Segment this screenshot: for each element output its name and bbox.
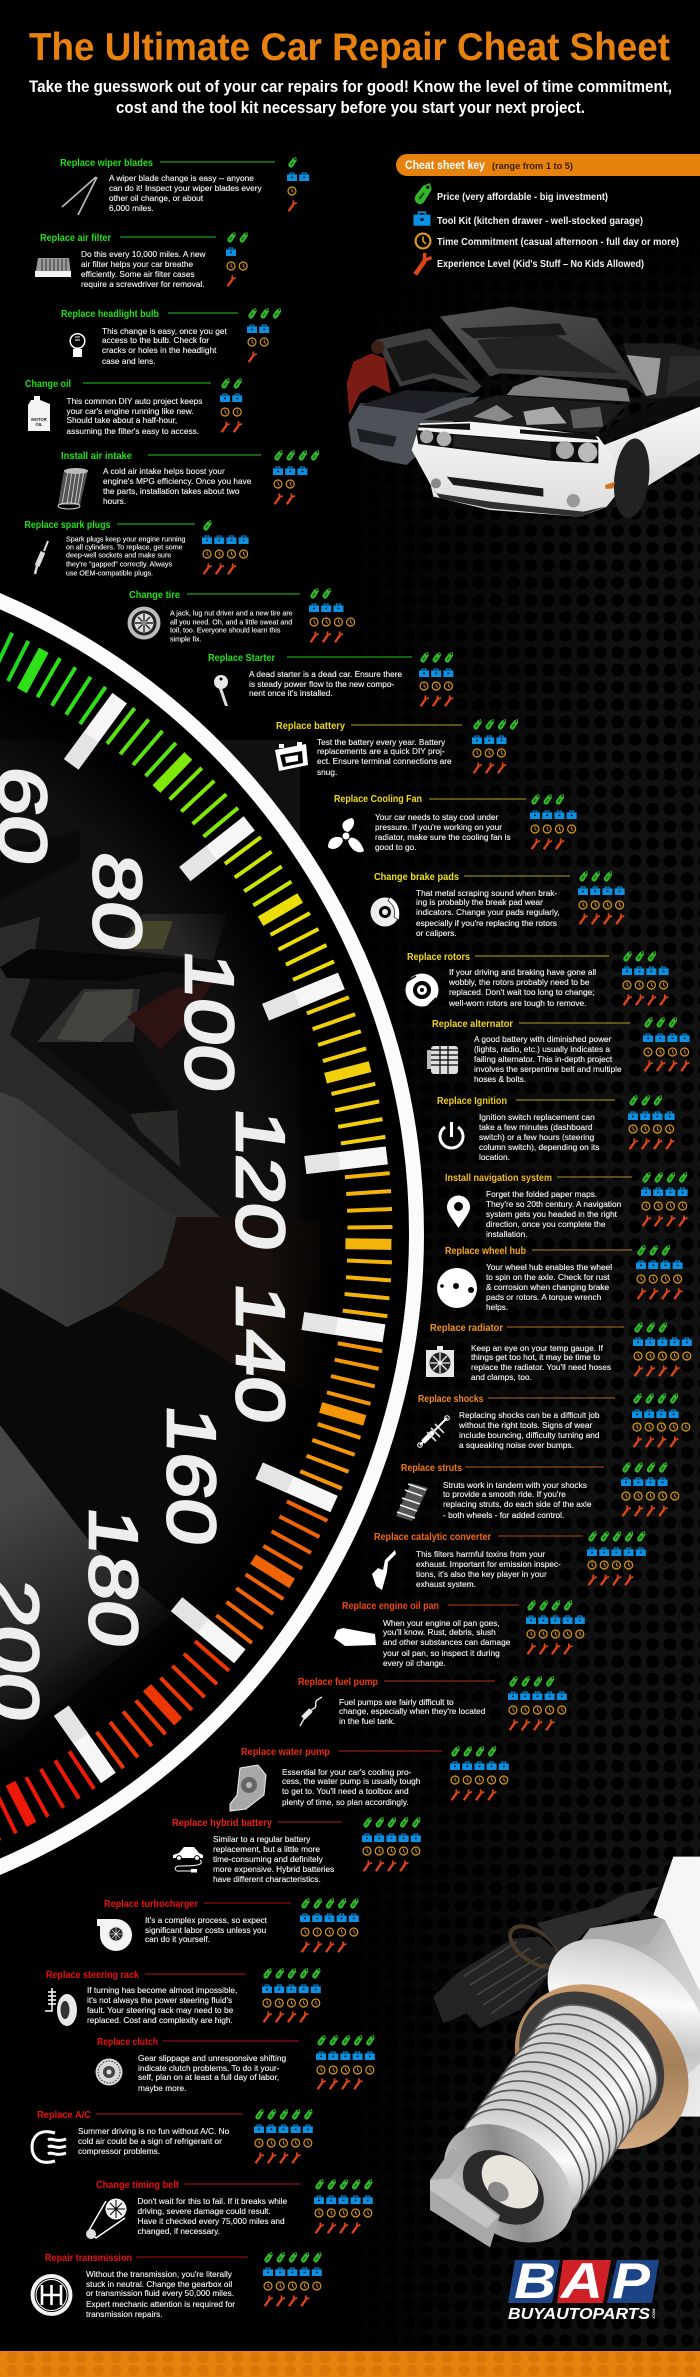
heading: Replace water pump [241,1746,330,1758]
heading: Replace struts [401,1462,462,1474]
description: Don't wait for this to fail. If it breaks while [138,2196,287,2206]
description: Without the transmission, you're literally [86,2269,233,2279]
ratings [202,520,249,574]
icon: air conditioning [32,2132,66,2162]
description: pressure. If you're working on your [375,822,502,832]
panel: Replace water pump [230,1746,509,1811]
speed numbers: 160 [153,1402,229,1550]
ratings [262,1968,321,2022]
description: Summer driving is no fun without A/C. No [78,2126,230,2136]
BAP logo: B [514,2253,556,2309]
ratings [419,652,453,706]
panel: Replace headlight bulb [61,308,281,366]
description: or calipers. [416,928,457,938]
icon: alternator [427,1046,458,1074]
ratings [220,378,242,432]
speed numbers [0,762,298,1726]
panel: Replace battery [275,719,518,777]
description: hoses & bolts. [474,1074,526,1084]
panel: Replace clutch [96,2035,375,2093]
description: can do it! Inspect your wiper blades every [109,183,263,193]
description: include bouncing, difficulty turning and [459,1430,600,1440]
copper washer [482,1950,700,2183]
metal collar and hex [521,1857,700,2117]
description: helps. [486,1302,508,1312]
description: to spin on the axle. Check for rust [486,1272,610,1282]
description: It's a complex process, so expect [145,1915,268,1925]
description: self, plan on at least a full day of labor, [138,2072,279,2082]
description: take a few minutes (dashboard [479,1122,593,1132]
heading: Replace Ignition [437,1095,507,1107]
description: the parts, installation takes about two [103,486,240,496]
icon: power button [440,1122,463,1148]
description: Forget the folded paper maps. [486,1189,597,1199]
description: have different characteristics. [213,1874,321,1884]
description: installation. [486,1229,528,1239]
BAP logo: A [559,2253,603,2309]
description: case and lens. [102,356,156,366]
ratings [314,2179,373,2233]
panel: cheat sheet key: Tool Kit (kitchen drawer - well-stocked garage) [437,216,643,227]
icon: water pump [230,1765,266,1811]
description: time-consuming and definitely [213,1854,324,1864]
description: failing alternator. This in-depth project [474,1054,613,1064]
panel: Replace alternator [427,1017,690,1084]
ratings [628,1095,675,1149]
description: & corrosion when changing brake [486,1282,610,1292]
description: Gear slippage and unresponsive shifting [138,2053,286,2063]
description: replace the radiator. You'll need hoses [471,1362,611,1372]
ratings [632,1393,690,1447]
heading: Replace battery [276,720,345,732]
description: Do this every 10,000 miles. A new [81,249,207,259]
description: direction, once you complete the [486,1219,606,1229]
description: Spark plugs keep your engine running [66,536,186,544]
BAP logo: P [612,2253,651,2309]
description: your oil pan, so inspect it during [383,1648,500,1658]
panel: cheat sheet key: Cheat sheet key [405,160,486,172]
heading: Change timing belt [96,2179,179,2191]
panel: Replace hybrid battery [172,1817,421,1884]
description: switch) or a few hours (steering [479,1132,595,1142]
description: A jack, lug nut driver and a new tire are [170,610,293,618]
icon: shock absorber [418,1416,449,1447]
ratings [621,1462,679,1516]
panel: Replace struts [396,1462,679,1521]
ratings [316,2035,375,2089]
description: a squeaking noise over bumps. [459,1440,574,1450]
heading: Replace Starter [208,652,275,664]
BAP logo [508,2253,659,2323]
description: cracks or holes in the headlight [102,345,217,355]
panel: Replace Cooling Fan [328,793,577,852]
heading: Replace Cooling Fan [334,793,422,805]
heading: Replace air filter [40,232,111,244]
heading: Replace engine oil pan [342,1600,439,1612]
BAP logo: BUYAUTOPARTS [508,2306,651,2323]
description: other oil change, or about [109,193,204,203]
description: maybe more. [138,2083,186,2093]
description: indicate clutch problems. To do it your- [138,2063,280,2073]
description: driving, severe damage could result. [138,2206,271,2216]
ratings [254,2109,313,2163]
icon: tire [128,606,160,640]
icon: key [214,675,228,706]
icon: map pin [447,1196,470,1228]
description: ing is probably the break pad wear [416,897,543,907]
description: fault. Your steering rack may need to be [87,2005,234,2015]
description: involves the serpentine belt and multiple [474,1064,622,1074]
panel: Replace catalytic converter [372,1531,646,1590]
panel: Replace air filter [35,232,248,289]
description: nent once it's installed. [249,688,333,698]
description: If turning has become almost impossible, [87,1985,237,1995]
description: changed, if necessary. [138,2226,220,2236]
heading: Install navigation system [445,1172,552,1184]
heading: Replace wheel hub [445,1245,526,1257]
icon: rotor [406,974,438,1006]
subtitle [29,78,672,117]
description: hours. [103,496,126,506]
panel: cheat sheet key [396,154,700,274]
panel: Replace Starter [208,652,453,706]
description: wobbly, the rotors probably need to be [448,977,590,987]
icon: turbocharger [97,1919,132,1951]
BAP logo: .COM [651,2308,656,2319]
icon: radiator [426,1346,454,1377]
icon: fan [328,818,364,852]
description: air filter helps your car breathe [81,259,193,269]
description: toil, too. Everyone should learn this [170,626,281,634]
description: efficiently. Some air filter cases [81,269,195,279]
description: Your car needs to stay cool under [375,812,499,822]
outer white arc [0,545,416,1923]
heading: Replace turbocharger [104,1898,198,1910]
engine photo behind gauge [0,544,418,1924]
description: engine's MPG efficiency. Once you have [103,476,252,486]
ratings [587,1531,646,1585]
ratings [622,951,669,1005]
description: or transmission fluid every 50,000 miles. [86,2288,234,2298]
description: snug. [317,767,337,777]
description: pads or rotors. A torque wrench [486,1292,602,1302]
panel: Replace steering rack [45,1968,321,2026]
description: system gets you headed in the right [486,1209,618,1219]
icon: oil jug: OIL [36,422,43,427]
icon: fuel pump [300,1697,322,1726]
panel: Change oil [25,378,242,436]
description: you'll know. Rust, debris, slush [383,1627,496,1637]
spark plug illustration [421,1857,700,2267]
panel: Replace Ignition [437,1095,675,1162]
description: assuming the filter's easy to access. [66,426,199,436]
ratings [508,1676,567,1730]
panel: Change timing belt [86,2179,373,2239]
description: and other substances can damage [383,1637,511,1647]
heading: Replace fuel pump [298,1676,378,1688]
description: use OEM-compatible plugs. [66,570,153,578]
description: simple fix. [170,636,202,644]
panel: Replace wiper blades [60,157,309,215]
ratings [300,1898,359,1952]
description: to provide a smooth ride. If you're [443,1489,566,1499]
heading: Replace hybrid battery [172,1817,272,1829]
description: it's not always the power steering fluid's [87,1995,232,2005]
panel: Install air intake [58,450,319,509]
description: replaced. Don't wait too long to change; [449,987,594,997]
tick marks [0,625,392,1849]
ratings [530,794,577,849]
heading: Replace rotors [407,951,470,963]
description: your car's engine running like new. [66,406,194,416]
description: This common DIY auto project keeps [66,396,202,406]
heading: Replace A/C [37,2109,91,2121]
description: They're so 20th century. A navigation [486,1199,622,1209]
description: and clamps, too. [471,1372,532,1382]
description: exhaust system. [416,1579,476,1589]
description: cold air could be a sign of refrigerant or [78,2136,222,2146]
description: Similar to a regular battery [213,1834,311,1844]
description: in the fuel tank. [339,1716,395,1726]
ratings [578,871,625,924]
icon: bulb [70,334,85,357]
description: without the right tools. Signs of wear [458,1420,593,1430]
car photo illustration [347,307,700,520]
icon: brake disc [370,897,400,926]
heading: Install air intake [61,450,132,462]
gauge: speedometer [0,544,418,1924]
panel: Replace radiator [426,1322,692,1382]
description: deep-well sockets and make sure [66,552,171,560]
description: they're "gapped" correctly. Always [66,560,172,568]
description: column switch), depending on its [479,1142,599,1152]
icon: air intake filter [58,468,88,509]
panel: cheat sheet key: Time Commitment (casual afternoon - full day or more) [437,237,679,248]
heading: Repair transmission [45,2252,132,2264]
icon: wheel hub [437,1268,477,1308]
description: Replacing shocks can be a difficult job [459,1410,600,1420]
description: transmission repairs. [86,2309,163,2319]
description: stuck in neutral. Change the gearbox oil [86,2279,232,2289]
description: A wiper blade change is easy -- anyone [109,173,254,183]
heading: Replace steering rack [46,1969,139,1981]
heading: Replace wiper blades [60,157,153,169]
ratings [643,1017,690,1071]
speed numbers: 180 [75,1504,151,1652]
icon: timing belt [86,2198,126,2239]
description: Should take about a half-hour, [66,415,177,425]
speed numbers: 120 [222,1105,298,1255]
icon: hybrid car with plug [173,1847,203,1872]
panel: Replace turbocharger [97,1898,359,1952]
description: When your engine oil pan goes, [383,1618,500,1628]
description: well-worn rotors are tough to remove. [448,998,586,1008]
icon: oil pan [334,1628,376,1646]
ratings [450,1746,509,1800]
panel: Change brake pads [370,871,625,938]
icon: catalytic converter [372,1550,396,1590]
icon: wipers [62,177,97,215]
description: plenty of time, so plan accordingly. [282,1797,409,1807]
ratings [641,1172,688,1226]
description: indicators. Change your pads regularly, [416,907,560,917]
panel: Replace shocks [418,1393,690,1450]
description: That metal scraping sound when brak- [416,888,557,898]
heading: Replace alternator [432,1018,513,1030]
description: Ignition switch replacement can [479,1112,595,1122]
bottom orange band [0,2351,700,2377]
heading: Replace headlight bulb [61,308,159,320]
ratings [526,1600,585,1654]
tip with ceramic and electrode [421,2100,596,2267]
description: access to the bulb. Check for [102,335,209,345]
description: ect. Ensure terminal connections are [317,756,452,766]
description: more expensive. Hybrid batteries [213,1864,334,1874]
description: Expert mechanic attention is required for [86,2299,235,2309]
description: cess, the water pump is usually tough [282,1776,421,1786]
panel: Install navigation system [445,1172,688,1239]
heading: Replace spark plugs [24,519,111,531]
icon: spark plug [35,541,48,574]
description: 6,000 miles. [109,203,154,213]
title: The Ultimate Car Repair Cheat Sheet [29,26,670,69]
description: tions, it's also the key player in your [416,1569,547,1579]
description: can do it yourself. [145,1934,210,1944]
description: replacing struts, do each side of the axle [443,1499,592,1509]
heading: Replace clutch [97,2036,158,2048]
description: is steady power flow to the new compo- [249,679,395,689]
description: If your driving and braking have gone all [449,967,596,977]
description: replacement, but a little more [213,1844,320,1854]
panel: Replace engine oil pan [334,1600,585,1668]
icon: oil jug [28,396,50,431]
description: significant labor costs unless you [145,1925,267,1935]
ratings [309,588,355,642]
threaded body [440,1982,678,2242]
icon: steering rack and wheel [45,1988,77,2026]
description: A dead starter is a dead car. Ensure there [249,669,403,679]
panel: cheat sheet key: Experience Level (Kid's Stuff – No Kids Allowed) [437,259,644,270]
icon: oil jug: MOTOR [31,417,47,422]
panel: Change tire [128,588,355,644]
description: every oil change. [383,1658,446,1668]
description: A good battery with diminished power [474,1034,612,1044]
heading: Change tire [129,589,180,601]
icon: struts [396,1483,428,1521]
panel: Replace rotors [406,951,669,1008]
description: (lights, radio, etc.) usually indicates a [474,1044,610,1054]
ratings [226,232,248,286]
heading: Replace radiator [430,1322,503,1334]
description: exhaust. Important for emission inspec- [416,1559,561,1569]
ratings [247,308,281,362]
speed numbers: 100 [171,947,247,1097]
description: replacements are a quick DIY proj- [317,746,445,756]
description: location. [479,1152,510,1162]
speed numbers: 80 [79,848,155,956]
panel: Replace wheel hub [437,1245,683,1312]
panel: cheat sheet key: (range from 1 to 5) [492,161,573,172]
description: replaced. Cost and complexity are high. [87,2015,233,2025]
icon: battery [275,742,308,771]
panel: Replace fuel pump [298,1676,567,1730]
ratings [273,450,319,504]
heading: Change oil [25,378,71,390]
heading: Change brake pads [374,871,459,883]
ratings [287,157,309,211]
icon: air filter [35,258,71,277]
ratings [636,1245,683,1299]
description: Struts work in tandem with your shocks [443,1480,587,1490]
description: things get too hot, it may be time to [471,1352,601,1362]
description: Essential for your car's cooling pro- [282,1767,412,1777]
panel: Repair transmission [30,2252,322,2319]
description: especially if you're replacing the rotors [416,918,557,928]
ratings [633,1322,692,1376]
ratings [263,2252,322,2306]
description: change, especially when they're located [339,1706,486,1716]
description: - both wheels - for added control. [443,1510,564,1520]
heading: Replace catalytic converter [374,1531,491,1543]
ratings [472,719,518,773]
description: Have it checked every 75,000 miles and [138,2216,285,2226]
description: good to go. [375,842,417,852]
panel: Replace spark plugs [24,519,249,578]
panel: cheat sheet key: Price (very affordable - big investment) [437,192,608,203]
description: This filters harmful toxins from your [416,1549,545,1559]
description: require a screwdriver for removal. [81,279,205,289]
description: to get to. You'll need a toolbox and [282,1786,409,1796]
background blurred spark plug [433,1887,660,2028]
description: A cold air intake helps boost your [103,466,225,476]
description: radiator, make sure the cooling fan is [375,832,511,842]
panel: Replace A/C [32,2109,313,2163]
description: on all cylinders. To replace, get some [66,544,183,552]
description: compressor problems. [78,2146,160,2156]
icon: clutch disc [96,2058,122,2086]
subtitle: cost and the tool kit necessary before you start your next project. [116,99,585,117]
description: This change is easy, once you get [102,326,228,336]
description: Fuel pumps are fairly difficult to [339,1697,454,1707]
description: Your wheel hub enables the wheel [486,1262,612,1272]
description: Keep an eye on your temp gauge. If [471,1343,604,1353]
icon: gear shift [30,2274,72,2316]
speed numbers: 140 [222,1280,298,1428]
ratings [362,1817,421,1871]
description: all you need. Oh, and a little sweat and [170,618,292,626]
heading: Replace shocks [418,1393,484,1405]
description: Test the battery every year. Battery [317,737,446,747]
